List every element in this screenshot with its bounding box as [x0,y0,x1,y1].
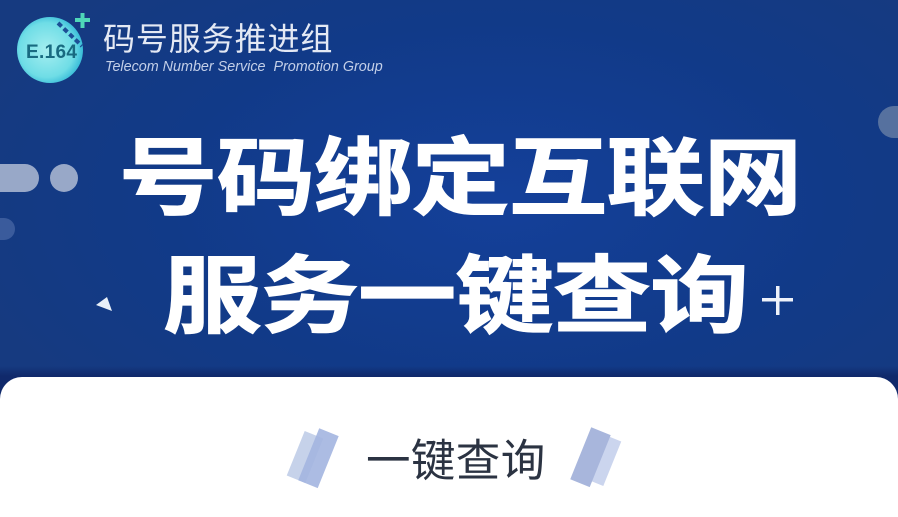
decorative faded dot left [0,218,15,240]
card heading: 一键查询 [366,437,546,486]
icon: right parallelograms [570,427,622,487]
icon: triangle [96,297,112,311]
decorative dot right [878,106,898,138]
logo title: 码号服务推进组 [103,21,333,57]
logo icon: E.164 globe: E.164 [26,42,77,63]
heading line 1: 号码绑定互联网 [119,110,801,233]
decorative pill left [0,164,39,192]
icon: plus [762,286,793,315]
logo subtitle: Telecom Number Service Promotion Group [105,59,383,75]
decorative dot left [50,164,78,192]
white card [0,377,898,517]
logo icon: E.164 globe [17,13,90,83]
heading line 2: 服务一键查询 [163,228,748,351]
icon: left parallelograms [286,428,339,488]
